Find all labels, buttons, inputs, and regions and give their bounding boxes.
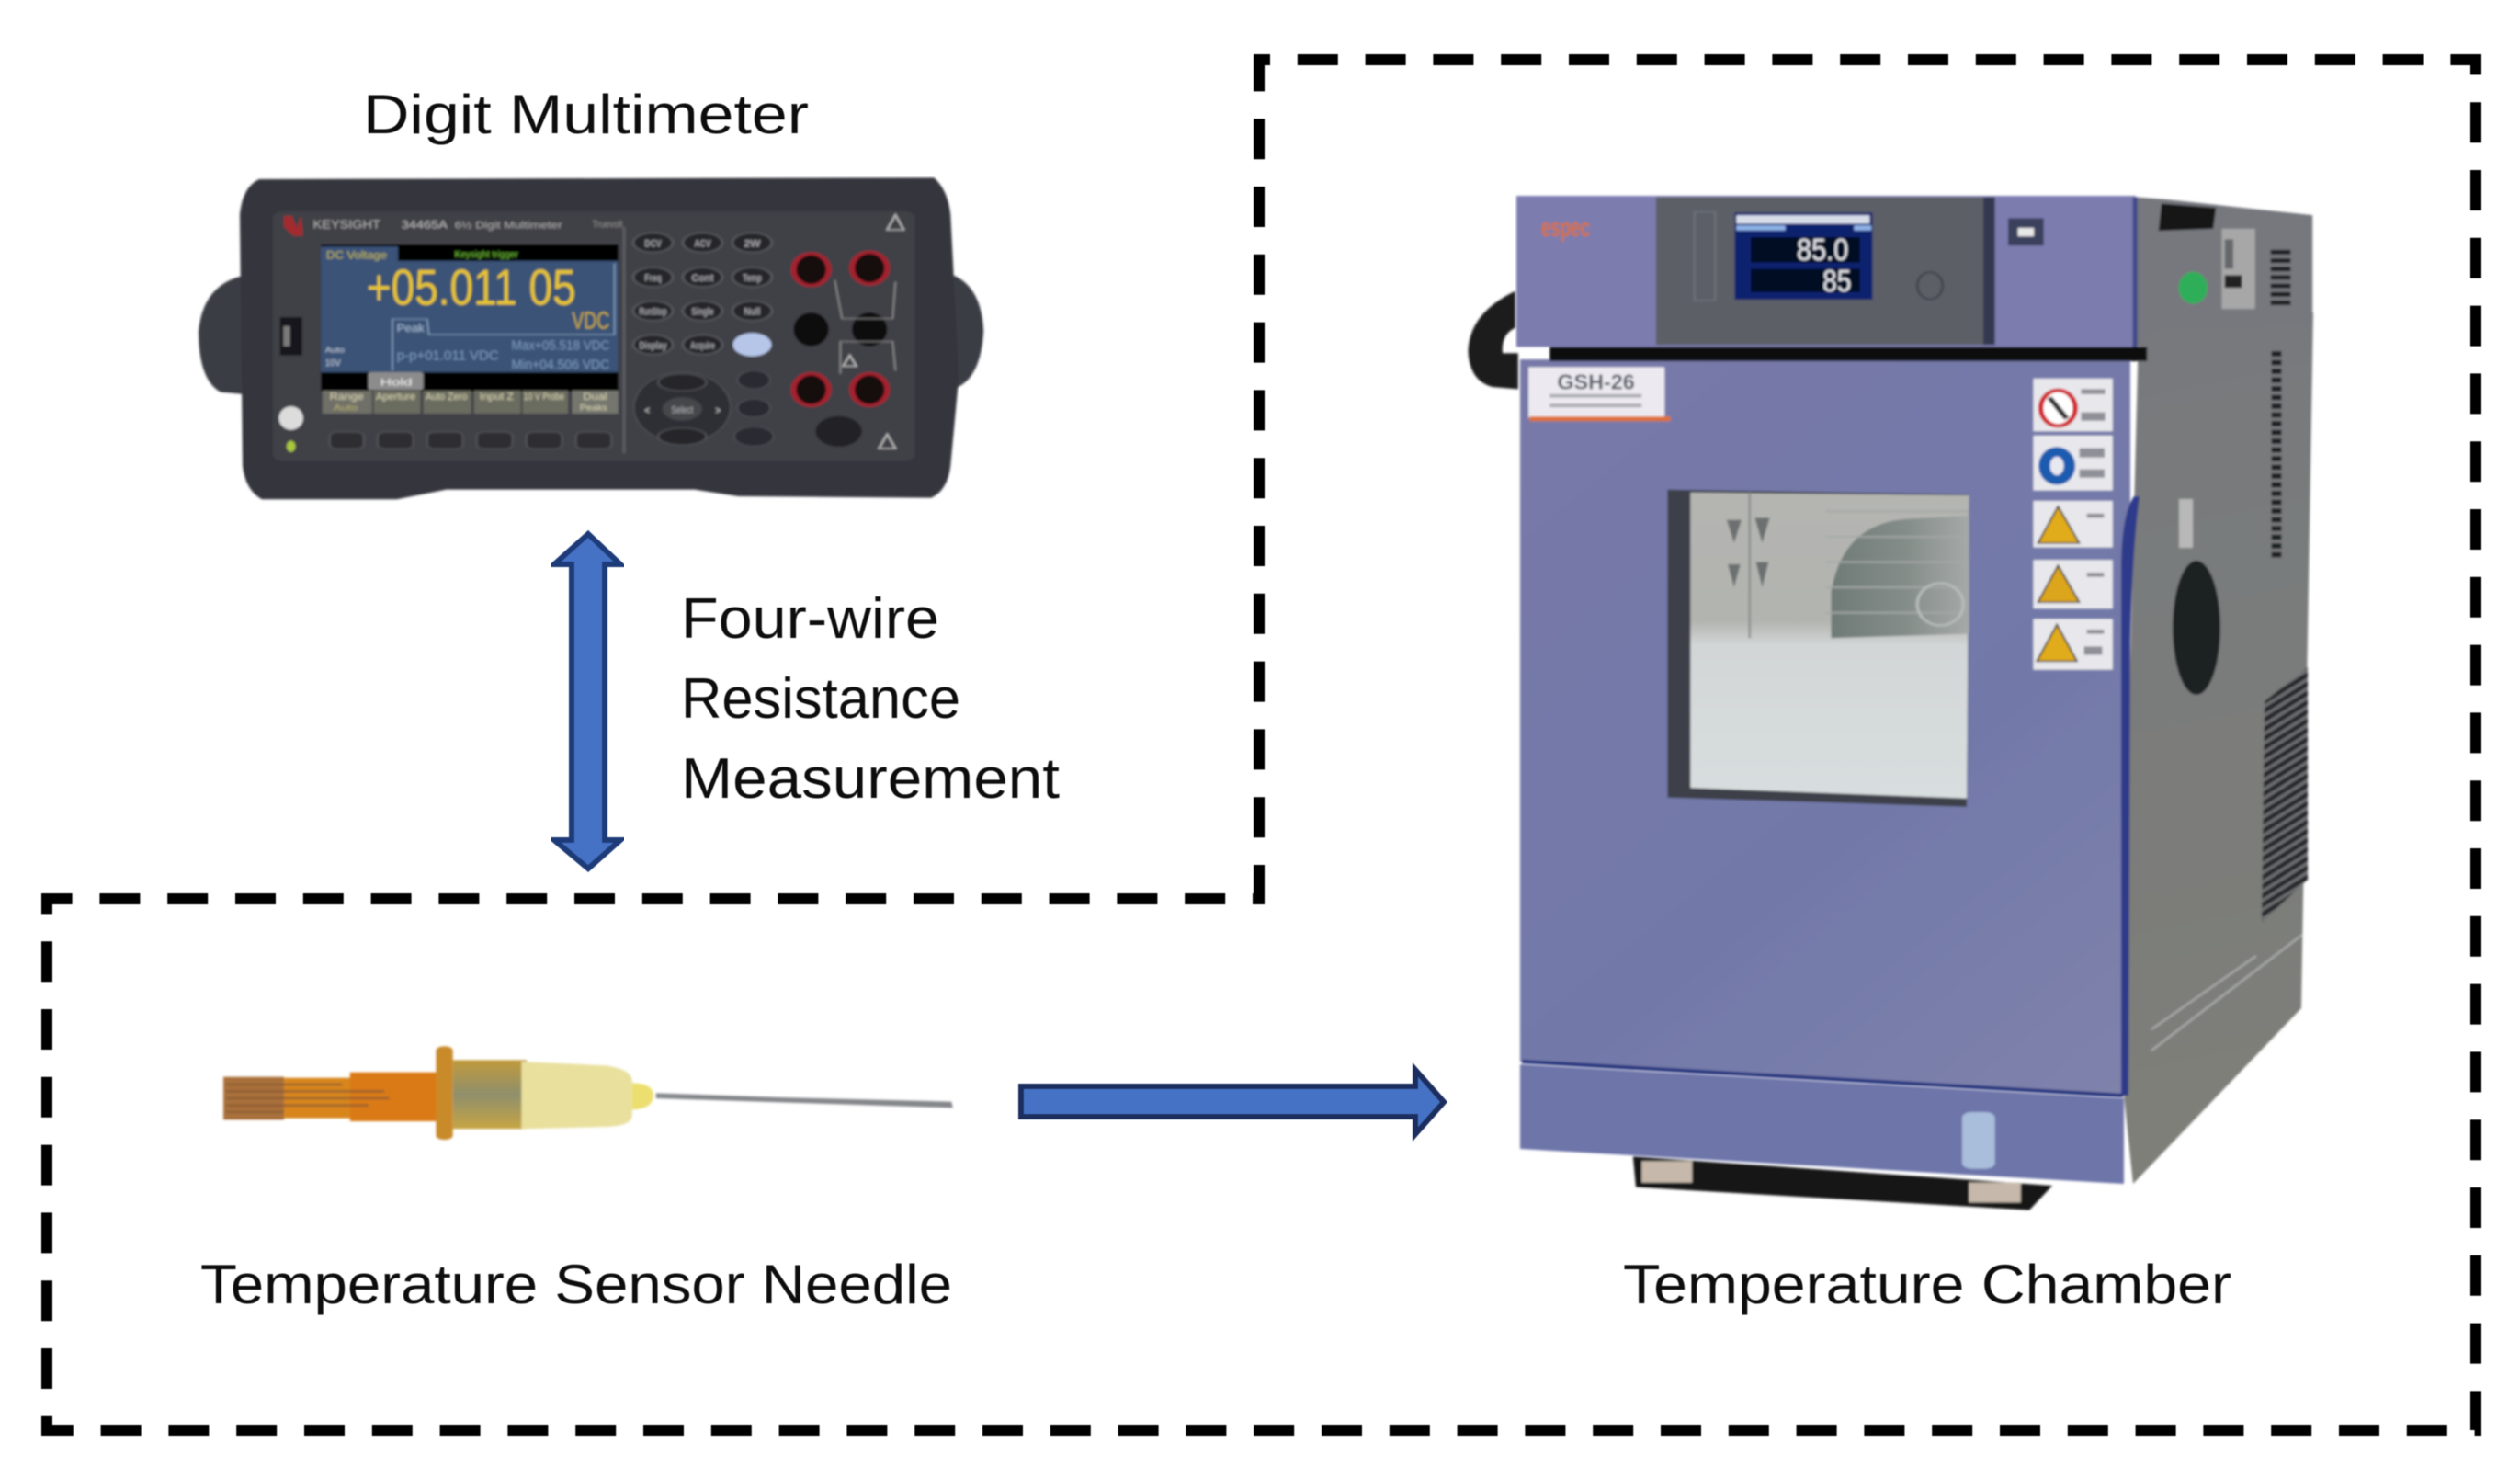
side vent, lower	[2262, 667, 2308, 922]
icon: digital multimeter: Null	[744, 306, 760, 317]
function key captions	[640, 238, 762, 351]
safety stickers	[2033, 379, 2113, 670]
soft-key labels: 10 V Probe	[524, 392, 564, 403]
touchscreen	[1735, 212, 1873, 300]
flex circuit tail	[223, 1077, 284, 1119]
function key captions: Freq	[645, 272, 662, 284]
icon: digital multimeter: Truevolt	[593, 219, 623, 230]
label: Temperature Sensor Needle: Temperature Sensor Needle	[200, 1254, 952, 1315]
head vent	[2271, 250, 2290, 305]
display screen: Hold	[380, 377, 413, 388]
side label	[2179, 499, 2193, 548]
black gap under head	[1549, 347, 2147, 361]
function key captions: Display	[640, 340, 667, 351]
translucent yellow hub	[521, 1062, 632, 1129]
text: Four-wire Resistance Measurement: Measurement	[681, 747, 1060, 811]
head side	[2136, 197, 2312, 347]
arrow: needle placed into chamber	[1021, 1070, 1444, 1134]
display screen: Min+04.506 VDC	[511, 357, 609, 372]
label: Temperature Chamber: Temperature Chamber	[1623, 1254, 2231, 1315]
ground terminals	[793, 312, 887, 447]
arrow: two-way measurement link	[554, 534, 620, 869]
model plate GSH-26	[1528, 367, 1671, 421]
model plate GSH-26: GSH-26	[1557, 369, 1635, 393]
window	[1667, 490, 1969, 807]
heading: Digit Multimeter: Digit Multimeter	[363, 84, 809, 145]
USB socket	[2008, 218, 2044, 245]
text: Four-wire Resistance Measurement: Resistance	[681, 667, 960, 731]
right handle	[936, 271, 983, 392]
top control head: espec	[1541, 213, 1590, 243]
display screen: p-p+01.011 VDC	[397, 348, 499, 363]
navigation pad: ‹	[643, 403, 651, 416]
needle hub	[453, 1060, 527, 1129]
display screen: Max+05.518 VDC	[511, 338, 609, 353]
icon: temperature sensor needle	[223, 1046, 953, 1140]
icon: digital multimeter: Temp	[743, 272, 762, 284]
door bottom seam	[1522, 1062, 2123, 1096]
display screen: Auto	[325, 346, 345, 354]
chamber door	[1520, 359, 2130, 1096]
function key captions: 2W	[744, 238, 761, 249]
display screen: Keysight trigger	[455, 250, 518, 260]
navigation pad: ›	[714, 403, 721, 416]
input terminals	[793, 252, 887, 405]
display screen: DC Voltage	[326, 249, 387, 261]
soft-key labels: Peaks	[580, 403, 607, 413]
flange	[436, 1046, 453, 1140]
function key captions: DCV	[645, 238, 662, 249]
brand strip: 34465A	[402, 218, 448, 231]
function keys	[633, 233, 772, 355]
brand strip	[284, 216, 623, 236]
panel buttons	[1695, 212, 1715, 301]
side vent, upper	[2272, 351, 2281, 558]
text: Four-wire Resistance Measurement: Four-wire	[681, 587, 939, 651]
function key captions: ACV	[695, 238, 711, 249]
icon: temperature chamber	[1469, 196, 2313, 1210]
function key captions: Single	[692, 306, 714, 317]
soft-key labels: Auto	[334, 403, 358, 413]
side seams	[2151, 935, 2302, 1051]
display screen: +05.011 05	[367, 259, 576, 315]
soft keys	[330, 432, 612, 449]
top control head: 85.0	[1797, 233, 1848, 267]
panel ring	[1917, 272, 1943, 300]
display screen: 10V	[325, 358, 341, 369]
text: Four-wire Resistance Measurement	[681, 587, 1060, 811]
display screen: VDC	[572, 308, 609, 334]
coiled cable	[1469, 291, 1518, 389]
icon: digital multimeter	[199, 177, 983, 499]
soft-key labels: Input Z	[480, 392, 514, 403]
chamber side panel	[2124, 312, 2313, 1184]
display screen: Peak	[397, 322, 425, 335]
function key captions: RunStop	[640, 306, 667, 317]
chamber base	[1520, 1064, 2124, 1184]
soft-key labels	[323, 391, 619, 414]
control panel	[1656, 197, 1995, 345]
top control head: 85	[1822, 265, 1851, 298]
latch	[2159, 203, 2216, 231]
needle shaft	[656, 1093, 953, 1108]
soft-key labels: Range	[330, 392, 364, 403]
function key captions: Acquire	[690, 340, 715, 351]
function key captions: Cont	[692, 272, 714, 284]
USB port	[280, 317, 302, 356]
green switch	[2179, 272, 2208, 304]
top control head	[1469, 196, 2312, 807]
door edge	[2121, 496, 2140, 1096]
warning triangles	[843, 215, 903, 449]
navigation pad	[634, 370, 774, 447]
feet bar	[1633, 1112, 2052, 1210]
soft-key labels: Dual	[583, 392, 607, 403]
breaker box	[2222, 229, 2255, 309]
brand strip: KEYSIGHT	[313, 218, 380, 232]
front panel	[273, 211, 914, 461]
brand strip: 6½ Digit Multimeter	[455, 220, 562, 231]
head front	[1516, 196, 2136, 347]
power button and LED	[278, 406, 303, 452]
navigation pad: Select	[671, 404, 694, 415]
display screen	[321, 244, 619, 392]
side handle	[2173, 561, 2220, 695]
hub tip	[632, 1083, 653, 1109]
soft-key labels: Auto Zero	[426, 392, 468, 403]
soft-key labels: Aperture	[376, 392, 415, 403]
multimeter body	[240, 177, 959, 499]
left handle	[199, 274, 254, 395]
shift key	[732, 333, 771, 357]
